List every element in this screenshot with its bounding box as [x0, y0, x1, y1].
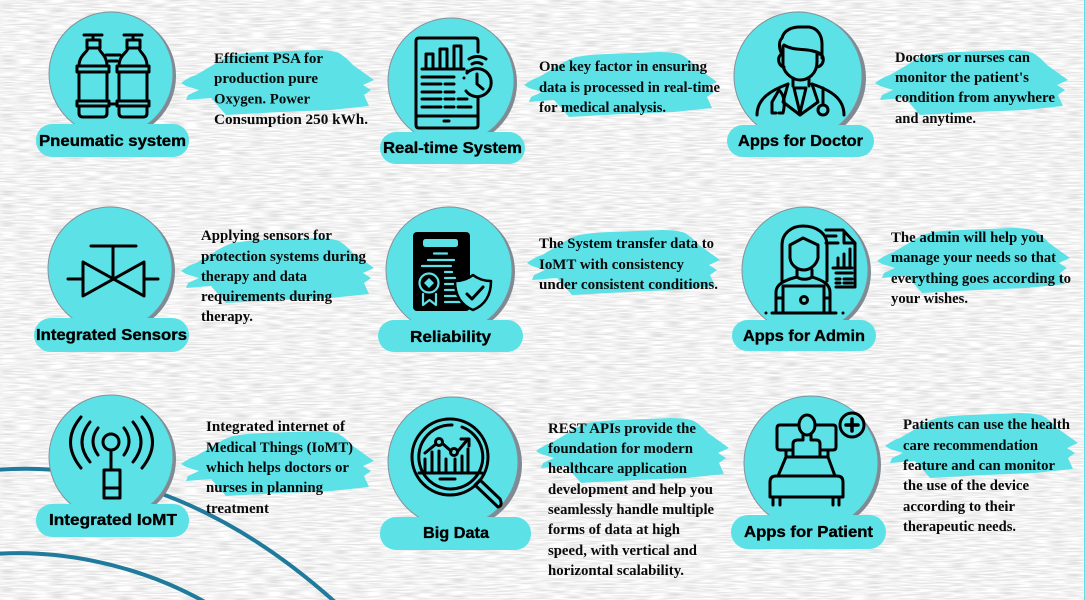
- description: requirements during: [201, 289, 333, 305]
- description: [895, 50, 1056, 127]
- panel: apps for patient: [731, 396, 1078, 549]
- description: seamlessly handle multiple: [548, 502, 715, 518]
- icon: gas cylinders: [77, 35, 149, 117]
- description: therapeutic needs.: [903, 519, 1016, 535]
- icon: certificate and shield: [413, 232, 491, 311]
- description: Medical Things (IoMT): [206, 440, 353, 456]
- label pill: [380, 132, 525, 164]
- panel: integrated IoMT: [36, 395, 374, 537]
- description: [548, 421, 715, 579]
- label text: Apps for Admin: [743, 328, 865, 345]
- label text: Reliability: [410, 329, 491, 346]
- label pill: [732, 320, 876, 351]
- description: the use of the device: [903, 478, 1030, 494]
- description: therapy and data: [201, 269, 308, 285]
- label text: Apps for Patient: [744, 524, 874, 541]
- description: [903, 417, 1070, 535]
- description: Patients can use the health: [903, 417, 1070, 433]
- brush stroke: [885, 413, 1078, 478]
- description: Consumption 250 kWh.: [214, 112, 368, 128]
- panel: real-time system: [380, 18, 721, 164]
- label text: Real-time System: [383, 140, 522, 157]
- icon: patient in bed with plus: [770, 413, 864, 505]
- panel: reliability: [378, 207, 720, 352]
- description: treatment: [206, 501, 269, 517]
- description: [214, 51, 368, 128]
- description: IoMT with consistency: [539, 257, 685, 273]
- description: [539, 236, 718, 293]
- brush stroke: [181, 238, 374, 303]
- description: data is processed in real-time: [539, 80, 721, 96]
- connector arcs: [0, 469, 335, 600]
- brush stroke: [536, 418, 729, 483]
- icon: antenna: [70, 417, 152, 498]
- description: production pure: [214, 71, 319, 87]
- brush stroke: [181, 431, 374, 496]
- icon: tablet with clock: [416, 38, 491, 128]
- description: manage your needs so that: [891, 250, 1056, 266]
- description: care recommendation: [903, 438, 1038, 454]
- label pill: [727, 125, 874, 157]
- description: monitor the patient's: [895, 70, 1029, 86]
- description: The System transfer data to: [539, 236, 714, 252]
- icon: magnifier with chart: [412, 419, 501, 507]
- label text: Big Data: [423, 525, 489, 542]
- description: according to their: [903, 499, 1016, 515]
- icon: admin with laptop: [766, 226, 855, 313]
- label pill: [378, 320, 523, 352]
- description: for medical analysis.: [539, 100, 666, 116]
- description: Doctors or nurses can: [895, 50, 1030, 66]
- description: feature and can monitor: [903, 458, 1056, 474]
- description: speed, with vertical and: [548, 543, 697, 559]
- panel: big data: [380, 397, 729, 579]
- panel: apps for doctor: [727, 12, 1068, 157]
- description: [539, 59, 721, 116]
- label text: Pneumatic system: [39, 133, 186, 150]
- description: and anytime.: [895, 111, 976, 127]
- icon: valve: [68, 246, 158, 296]
- description: REST APIs provide the: [548, 421, 697, 437]
- description: Applying sensors for: [201, 228, 333, 244]
- description: The admin will help you: [891, 230, 1044, 246]
- description: healthcare application: [548, 461, 687, 477]
- description: therapy.: [201, 309, 253, 325]
- brush stroke: [877, 228, 1070, 293]
- brush stroke: [527, 230, 720, 295]
- description: your wishes.: [891, 291, 968, 307]
- description: [891, 230, 1071, 307]
- description: Efficient PSA for: [214, 51, 324, 67]
- label text: Integrated Sensors: [36, 327, 187, 344]
- description: protection systems during: [201, 249, 367, 265]
- description: which helps doctors or: [206, 460, 350, 476]
- label pill: [34, 318, 189, 352]
- description: foundation for modern: [548, 441, 693, 457]
- description: Oxygen. Power: [214, 92, 311, 108]
- label text: Apps for Doctor: [738, 133, 863, 150]
- description: [206, 419, 353, 517]
- panel: apps for admin: [732, 207, 1071, 351]
- brush stroke: [875, 50, 1068, 115]
- description: under consistent conditions.: [539, 277, 718, 293]
- description: nurses in planning: [206, 480, 324, 496]
- description: One key factor in ensuring: [539, 59, 708, 75]
- label pill: [36, 124, 189, 157]
- description: forms of data at high: [548, 522, 680, 538]
- description: development and help you: [548, 482, 713, 498]
- panel: integrated sensors: [34, 207, 374, 352]
- description: condition from anywhere: [895, 90, 1056, 106]
- label pill: [36, 504, 189, 537]
- description: Integrated internet of: [206, 419, 345, 435]
- description: horizontal scalability.: [548, 563, 684, 579]
- description: [201, 228, 367, 325]
- description: everything goes according to: [891, 271, 1071, 287]
- brush stroke: [524, 52, 717, 117]
- panel: pneumatic system: [36, 12, 374, 157]
- label text: Integrated IoMT: [49, 512, 177, 529]
- brush stroke: [181, 50, 374, 115]
- label pill: [731, 515, 886, 549]
- icon: doctor: [757, 27, 844, 115]
- label pill: [380, 517, 531, 550]
